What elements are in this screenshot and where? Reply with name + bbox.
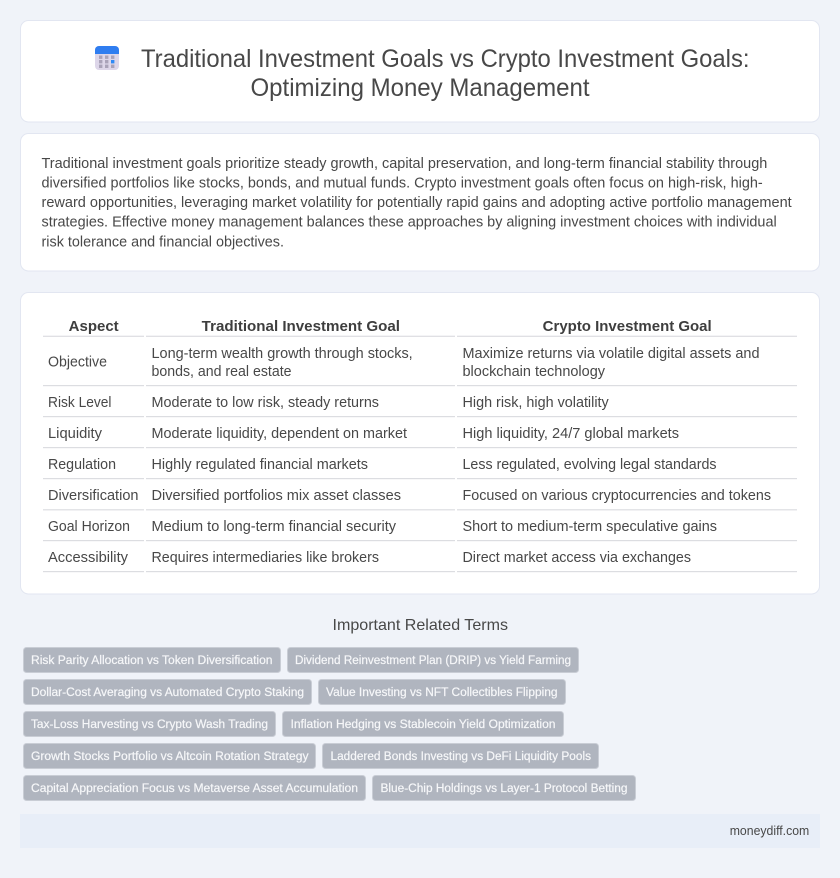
row: regulation: Highly regulated financial markets — [152, 457, 368, 473]
row: regulation: Less regulated, evolving legal standards — [462, 457, 716, 473]
title: Traditional Investment Goals vs Crypto Investment Goals: — [141, 45, 750, 73]
row: objective: blockchain technology — [462, 364, 606, 380]
tag: Capital Appreciation Focus vs Metaverse Asset Accumulation — [31, 781, 358, 795]
title — [141, 45, 750, 102]
intro paragraph: strategies. Effective money management balances these approaches by aligning investment choices with individual — [42, 215, 777, 231]
row: goal horizon: Goal Horizon — [48, 519, 130, 535]
tag — [322, 744, 598, 768]
row: objective — [43, 346, 797, 386]
row: diversification: Diversification — [48, 488, 138, 504]
row: regulation — [43, 457, 797, 479]
panel: introduction — [20, 134, 820, 271]
row: liquidity — [43, 426, 797, 448]
row: accessibility — [43, 550, 797, 572]
row: risk level: High risk, high volatility — [462, 395, 610, 411]
panel: header — [20, 20, 820, 122]
row: accessibility: Accessibility — [48, 550, 129, 566]
row: liquidity: Moderate liquidity, dependent on market — [152, 426, 407, 442]
row: accessibility: Requires intermediaries like brokers — [152, 550, 379, 566]
row: goal horizon: Short to medium-term speculative gains — [462, 519, 717, 535]
heading: important related terms: Important Related Terms — [332, 617, 508, 634]
table header row: Aspect — [69, 319, 119, 335]
tag: Laddered Bonds Investing vs DeFi Liquidity Pools — [330, 749, 591, 763]
tag: Value Investing vs NFT Collectibles Flipping — [326, 685, 558, 699]
row: diversification: Focused on various cryptocurrencies and tokens — [462, 488, 771, 504]
table header row — [43, 319, 797, 337]
tag: Dividend Reinvestment Plan (DRIP) vs Yield Farming — [295, 653, 571, 667]
tag — [24, 776, 366, 800]
row: diversification — [43, 488, 797, 510]
row: risk level: Risk Level — [48, 395, 112, 411]
panel: comparison table — [20, 292, 820, 594]
tag: Dollar-Cost Averaging vs Automated Crypto Staking — [31, 685, 304, 699]
row: risk level: Moderate to low risk, steady returns — [152, 395, 379, 411]
intro paragraph: risk tolerance and financial objectives. — [42, 234, 284, 250]
row: goal horizon — [43, 519, 797, 541]
panel: related term tags — [24, 648, 636, 800]
row: liquidity: Liquidity — [48, 426, 103, 442]
row: goal horizon: Medium to long-term financial security — [152, 519, 397, 535]
footer — [20, 814, 820, 848]
intro paragraph: reward opportunities, leveraging market volatility for potentially rapid gains and adopting active portfolio management — [42, 195, 792, 211]
tag — [372, 776, 636, 800]
row: regulation: Regulation — [48, 457, 116, 473]
row: liquidity: High liquidity, 24/7 global markets — [462, 426, 679, 442]
tag — [24, 712, 276, 736]
row: risk level — [43, 395, 797, 417]
tag: Tax-Loss Harvesting vs Crypto Wash Trading — [31, 717, 268, 731]
tag: Growth Stocks Portfolio vs Altcoin Rotation Strategy — [31, 749, 309, 763]
tag: Inflation Hedging vs Stablecoin Yield Optimization — [290, 717, 556, 731]
tag — [24, 648, 280, 672]
table header row: Crypto Investment Goal — [543, 319, 712, 335]
intro paragraph: Traditional investment goals prioritize steady growth, capital preservation, and long-term financial stability through — [42, 156, 767, 172]
row: accessibility: Direct market access via exchanges — [462, 550, 691, 566]
icon: calendar — [95, 46, 119, 70]
tag: Risk Parity Allocation vs Token Diversification — [31, 653, 273, 667]
title: Optimizing Money Management — [250, 74, 590, 102]
tag — [282, 712, 564, 736]
row: objective: Long-term wealth growth through stocks, — [152, 346, 413, 362]
row: diversification: Diversified portfolios mix asset classes — [152, 488, 401, 504]
intro paragraph: diversified portfolios like stocks, bonds, and mutual funds. Crypto investment goals often focus on high-risk, high- — [42, 176, 763, 192]
tag: Blue-Chip Holdings vs Layer-1 Protocol Betting — [380, 781, 628, 795]
table header row: Traditional Investment Goal — [202, 319, 400, 335]
tag — [318, 680, 566, 704]
row: objective: bonds, and real estate — [152, 364, 292, 380]
row: objective: Maximize returns via volatile digital assets and — [462, 346, 760, 362]
row: objective: Objective — [48, 355, 107, 371]
intro paragraph — [42, 156, 792, 250]
footer: moneydiff.com — [730, 823, 809, 838]
tag — [24, 744, 316, 768]
tag — [288, 648, 578, 672]
tag — [24, 680, 312, 704]
